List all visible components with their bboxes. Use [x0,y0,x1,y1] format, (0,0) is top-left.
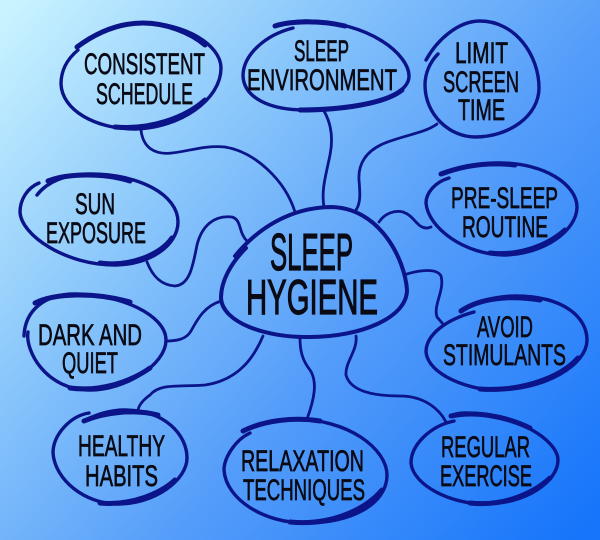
node: avoid stimulants: AVOID [477,311,533,344]
node: healthy habits: HABITS [85,460,158,493]
central node: sleep hygiene: SLEEP [270,224,353,282]
node: limit screen time [425,21,539,137]
node: consistent schedule: CONSISTENT [84,48,205,81]
node: sleep environment: ENVIRONMENT [247,64,397,97]
node: healthy habits: HEALTHY [78,430,165,463]
node: limit screen time: TIME [458,94,505,127]
node: sleep environment: SLEEP [294,35,349,68]
node: dark and quiet: QUIET [62,347,118,380]
node: limit screen time: LIMIT [455,37,508,70]
node: limit screen time: SCREEN [443,66,519,99]
node: sun exposure [20,174,178,265]
node: pre-sleep routine: ROUTINE [462,211,548,244]
central node: sleep hygiene: HYGIENE [246,271,378,325]
node: sun exposure: SUN [75,188,115,221]
node: relaxation techniques [224,419,387,523]
node: consistent schedule: SCHEDULE [96,78,193,111]
node: regular exercise: REGULAR [441,431,530,464]
node: relaxation techniques: RELAXATION [241,445,364,478]
node: pre-sleep routine [426,163,577,255]
node: healthy habits [53,410,187,504]
node: sun exposure: EXPOSURE [46,217,146,250]
node: regular exercise [411,413,558,504]
node: dark and quiet [24,294,166,390]
central node: sleep hygiene [221,207,407,337]
node: avoid stimulants [426,296,587,390]
node: consistent schedule [61,23,221,129]
node: sleep environment [243,21,409,110]
node: dark and quiet: DARK AND [38,319,142,352]
node: relaxation techniques: TECHNIQUES [243,474,365,507]
node: regular exercise: EXERCISE [440,460,532,493]
connector lines [138,111,446,422]
